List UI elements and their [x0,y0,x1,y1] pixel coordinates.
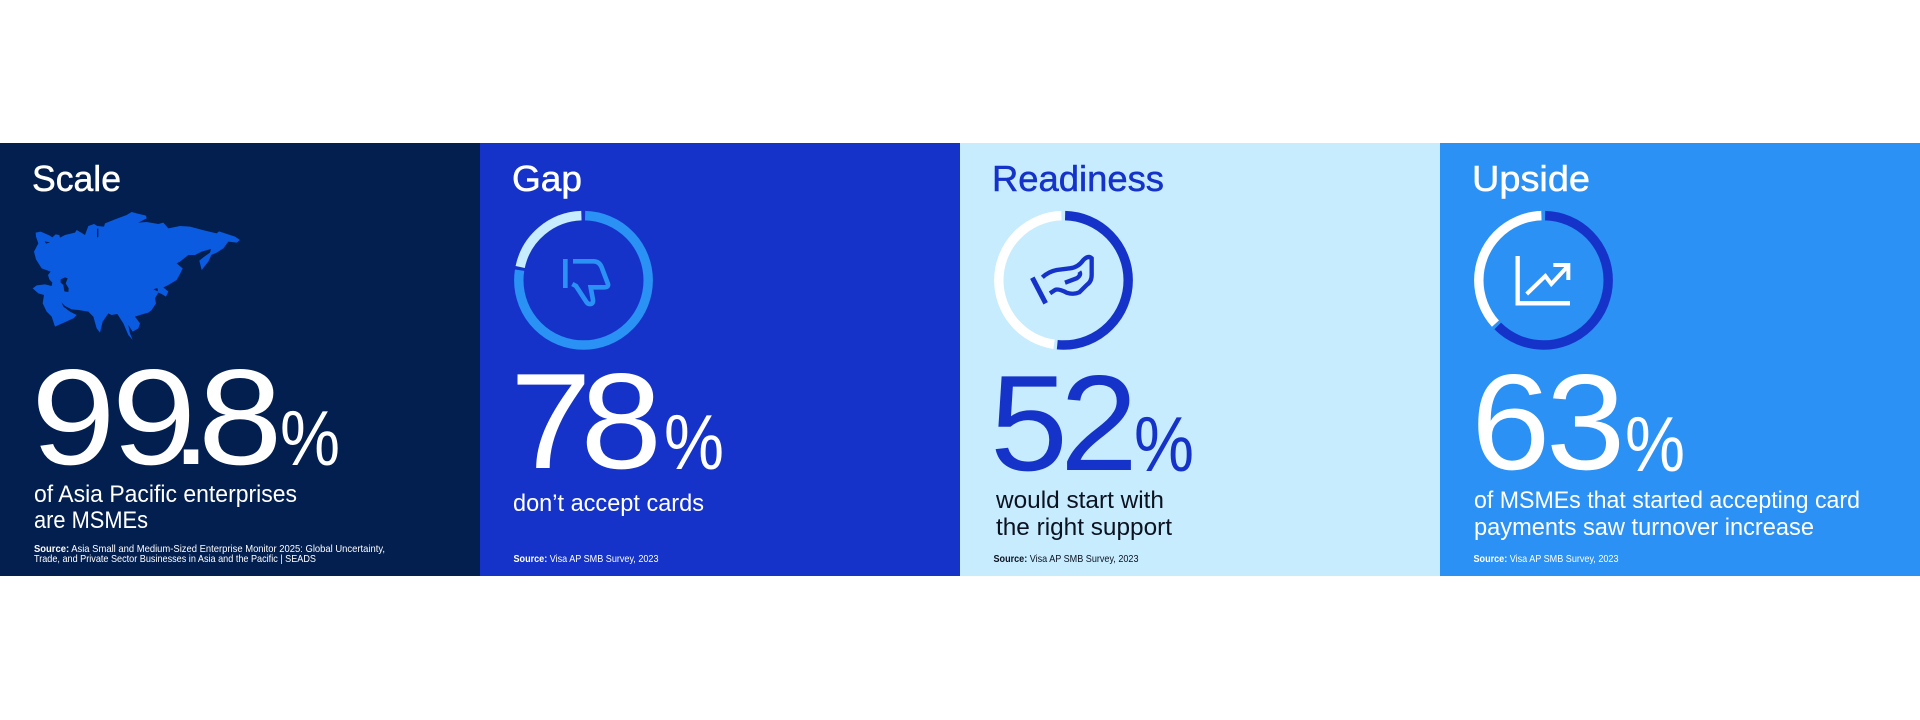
big number: 63%: 63 [1471,346,1625,498]
description: don’t accept cards [513,490,704,517]
description [1474,487,1860,541]
big number: 63%: % [1625,400,1685,488]
icon: map of Asia [33,212,240,340]
big number: 78%: % [664,398,724,486]
description: the right support [996,514,1172,541]
source [34,543,385,565]
icon: open hand [1032,257,1092,303]
big number: 52%: 52 [990,348,1138,500]
big number: 52%: % [1134,400,1194,488]
panel: Upside [1440,143,1920,576]
description: would start with [995,487,1164,514]
source: Source: Asia Small and Medium-Sized Enterprise Monitor 2025: Global Uncertainty, [34,543,385,555]
big number: 99.8%: 99.8 [31,341,283,493]
source: Source: Visa AP SMB Survey, 2023 [514,553,659,565]
description: of MSMEs that started accepting card [1474,487,1860,514]
big number: 78%: 78 [510,345,662,497]
description: of Asia Pacific enterprises [34,481,297,508]
description: are MSMEs [34,507,148,534]
source: Trade, and Private Sector Businesses in Asia and the Pacific | SEADS [34,553,316,565]
source: Source: Visa AP SMB Survey, 2023 [994,553,1139,565]
donut: 52 percent [999,216,1128,345]
description: payments saw turnover increase [1474,514,1814,541]
description [34,481,297,534]
heading: Readiness: Readiness [992,158,1164,199]
panel: Readiness [960,143,1440,576]
description [995,487,1172,541]
icon: rising chart [1518,256,1570,303]
donut: 63 percent [1479,216,1608,345]
icon: thumbs down [565,259,608,304]
big number: 99.8%: % [280,394,340,482]
donut: 78 percent [519,216,648,345]
heading: Gap: Gap [512,158,582,199]
heading: Upside: Upside [1472,158,1590,199]
panel: Gap [480,143,960,576]
source: Source: Visa AP SMB Survey, 2023 [1474,553,1619,565]
heading: Scale: Scale [32,158,121,199]
panel: Scale [0,143,480,576]
